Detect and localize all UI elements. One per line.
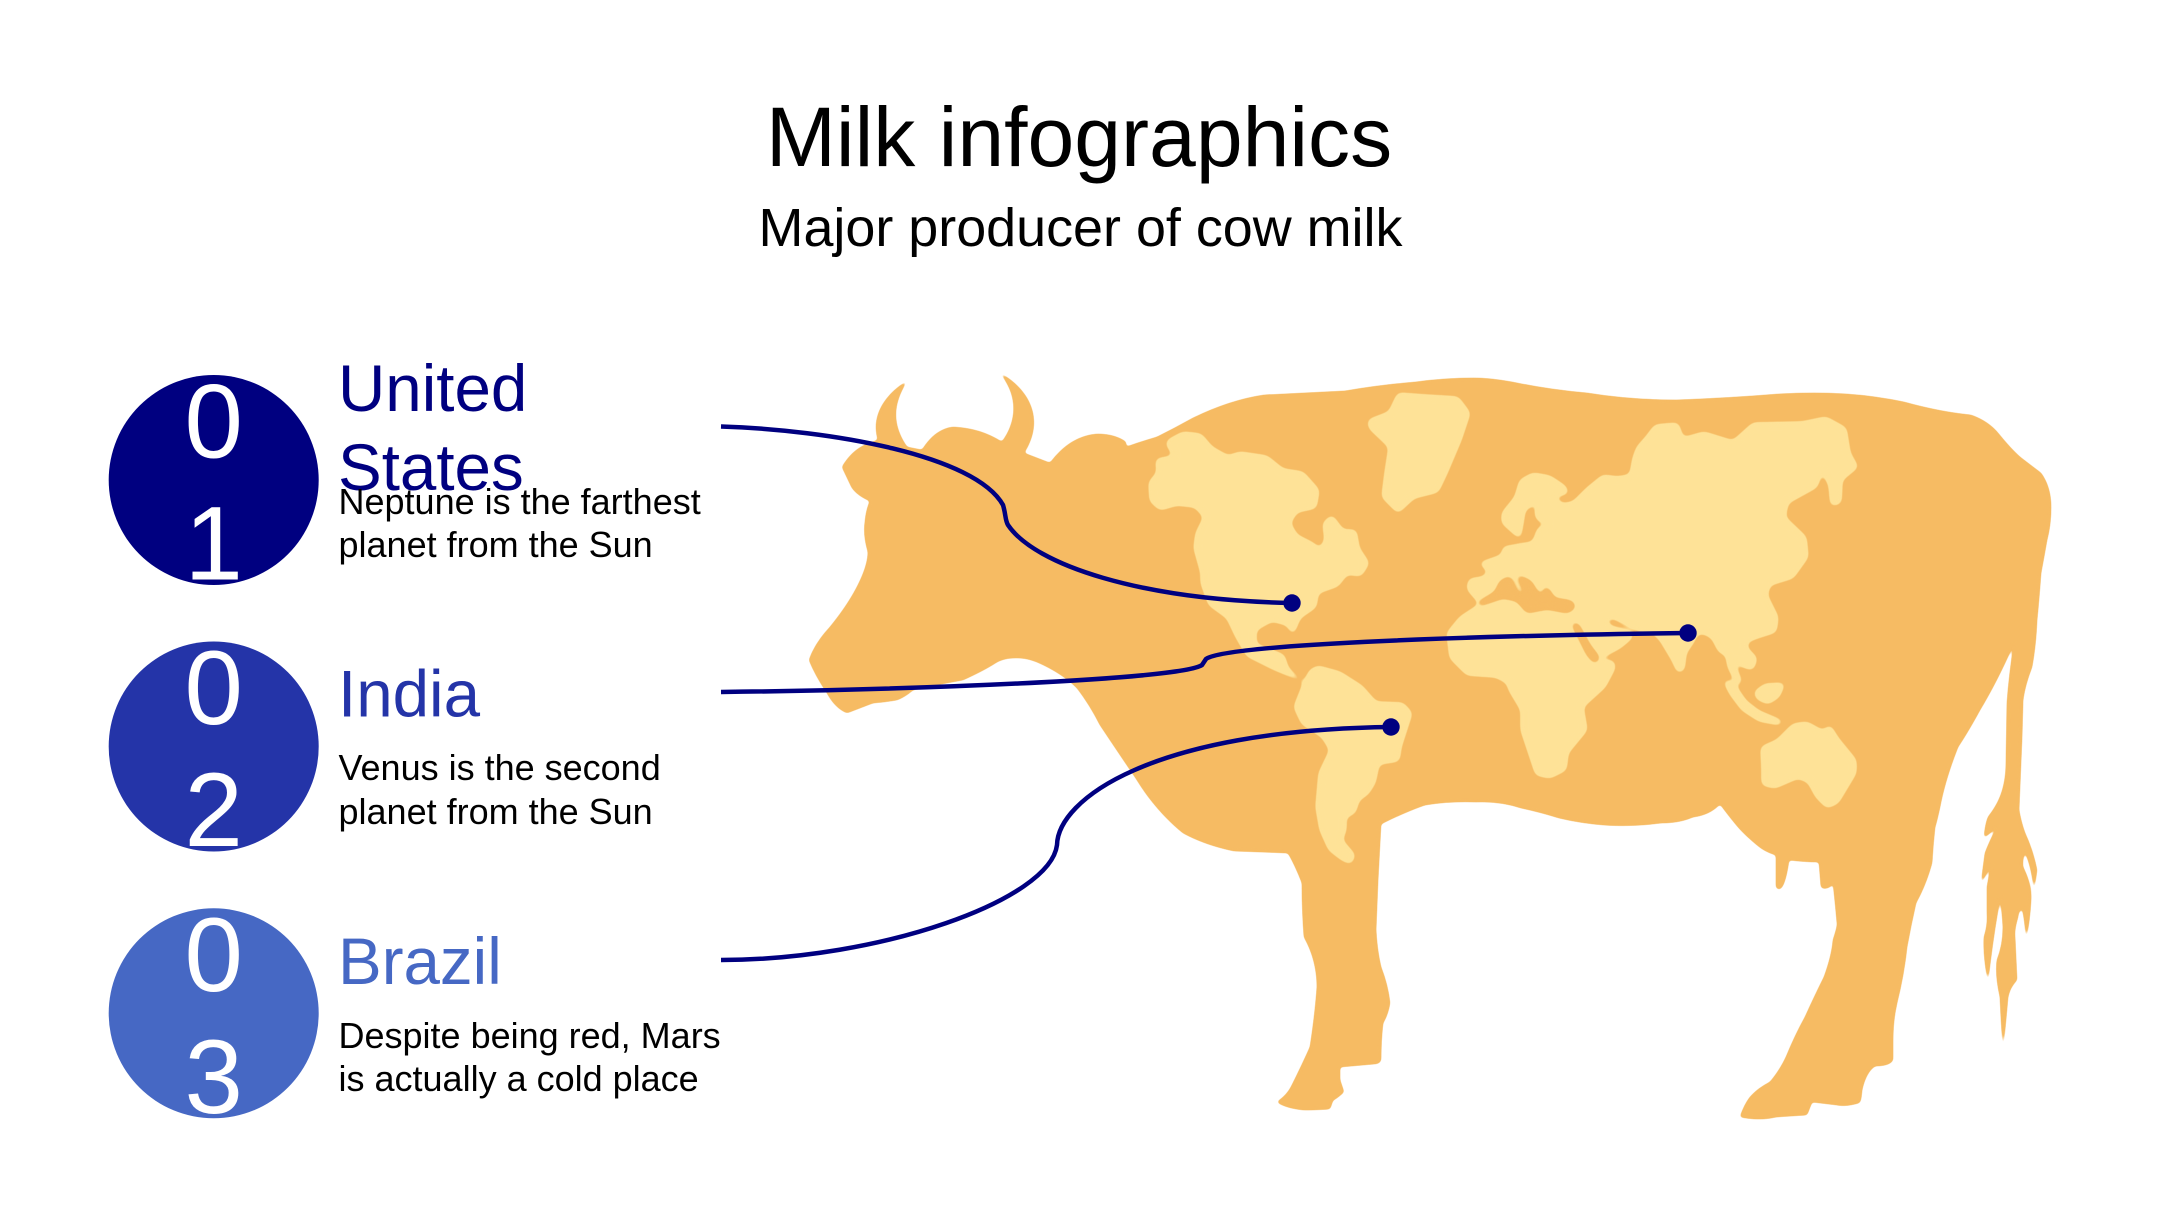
description: planet from the Sun bbox=[338, 791, 653, 832]
connector line: United States bbox=[721, 426, 1301, 612]
subtitle: Major producer of cow milk bbox=[759, 198, 1404, 258]
heading: United States: United bbox=[338, 352, 527, 425]
map: Greenland bbox=[1368, 393, 1470, 513]
map: Borneo bbox=[1754, 683, 1785, 704]
map: Red Sea bbox=[1571, 623, 1600, 664]
illustration: cow with world map bbox=[809, 373, 2051, 1119]
number badge 03: 0 bbox=[184, 897, 243, 1014]
heading: Brazil: Brazil bbox=[338, 925, 502, 998]
description: Neptune is the farthest bbox=[338, 481, 701, 522]
heading: India: India bbox=[338, 658, 481, 730]
number badge 01: 0 bbox=[184, 364, 243, 480]
description: Despite being red, Mars bbox=[338, 1015, 721, 1056]
heading: United States: States bbox=[338, 431, 524, 504]
number badge 02: 2 bbox=[184, 752, 243, 869]
map: Sumatra and Java bbox=[1723, 680, 1783, 725]
item 02: India bbox=[109, 630, 661, 869]
description: Venus is the second bbox=[338, 747, 661, 788]
map: Australia bbox=[1761, 722, 1856, 808]
number badge 03 bbox=[109, 897, 319, 1136]
cow silhouette bbox=[809, 373, 2051, 1119]
description: is actually a cold place bbox=[338, 1058, 699, 1099]
number badge 03: 3 bbox=[184, 1019, 243, 1136]
map: North and Central America bbox=[1149, 432, 1369, 684]
number badge 02 bbox=[109, 630, 319, 869]
item 01: United States bbox=[109, 352, 701, 602]
number badge 01 bbox=[109, 364, 319, 602]
world map land bbox=[1149, 393, 1858, 864]
number badge 02: 0 bbox=[184, 630, 243, 747]
map: Mediterranean Sea bbox=[1476, 574, 1576, 613]
connector line: India bbox=[721, 624, 1697, 692]
title: Milk infographics bbox=[766, 90, 1392, 184]
map: Eurasia and Africa bbox=[1447, 417, 1858, 778]
connector line: Brazil bbox=[721, 718, 1400, 960]
number badge 01: 1 bbox=[184, 486, 243, 602]
map: inland seas bbox=[1476, 574, 1600, 664]
description: planet from the Sun bbox=[338, 524, 653, 565]
map: South America bbox=[1294, 666, 1412, 864]
item 03: Brazil bbox=[109, 897, 721, 1136]
